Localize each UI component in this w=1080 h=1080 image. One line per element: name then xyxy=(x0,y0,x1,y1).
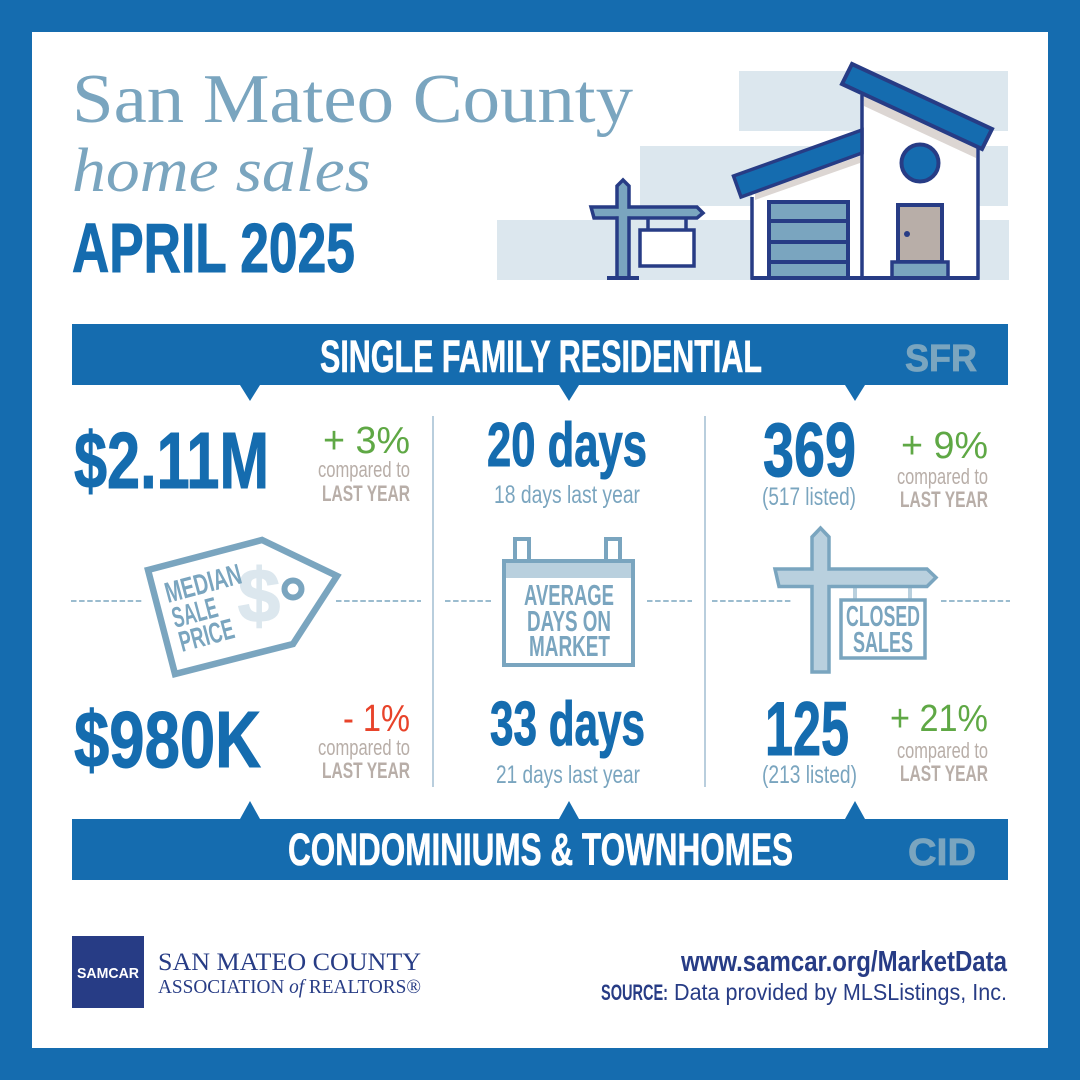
logo: SAMCAR: SAN MATEO COUNTY xyxy=(158,949,421,976)
stat: CID closed sales: + 21% xyxy=(890,698,988,740)
stat: SFR closed sales: LAST YEAR xyxy=(900,487,988,512)
stat: SFR closed sales: compared to xyxy=(897,464,988,489)
icon: calendar xyxy=(504,539,633,665)
stat: CID average days: 33 days xyxy=(490,690,645,759)
stat: SFR closed sales: (517 listed) xyxy=(762,483,856,511)
stat: CID average days xyxy=(490,690,645,789)
stat: SFR closed sales: + 9% xyxy=(901,425,988,467)
logo: SAMCAR xyxy=(72,936,421,1008)
stat: CID median sale price: - 1% xyxy=(343,698,410,740)
column dividers xyxy=(432,416,706,787)
banner: single family residential: SFR xyxy=(905,338,977,380)
title: home sales xyxy=(72,137,371,205)
stat: SFR median sale price: LAST YEAR xyxy=(322,481,410,506)
stat: CID closed sales: (213 listed) xyxy=(762,761,857,789)
stat: SFR closed sales xyxy=(762,408,988,512)
icon: price tag xyxy=(148,540,337,674)
icon: closed sales sign xyxy=(775,528,936,672)
title: San Mateo County xyxy=(72,61,633,138)
stat: SFR median sale price: compared to xyxy=(318,457,410,482)
footer source xyxy=(601,946,1008,1005)
stat: CID closed sales: LAST YEAR xyxy=(900,761,988,786)
logo: SAMCAR: ASSOCIATION of REALTORS® xyxy=(158,976,421,998)
title: APRIL 2025 xyxy=(72,209,355,287)
illustration: house and sign xyxy=(497,64,1009,280)
banner: condominiums and townhomes xyxy=(72,801,1008,880)
icon: calendar: AVERAGE xyxy=(524,580,614,612)
footer source: Data provided by MLSListings, Inc. xyxy=(674,979,1007,1005)
stat: SFR average days xyxy=(487,411,647,509)
stat: SFR average days: 18 days last year xyxy=(494,481,640,509)
logo: SAMCAR: SAMCAR xyxy=(77,965,139,982)
stat: SFR median sale price: $2.11M xyxy=(74,416,269,505)
title xyxy=(72,61,633,287)
dashed lines xyxy=(71,600,1010,602)
icon: price tag: SALE xyxy=(169,592,221,635)
icon: price tag: $ xyxy=(238,554,280,639)
stat: CID closed sales: 125 xyxy=(765,687,849,772)
icon: price tag: PRICE xyxy=(176,613,238,659)
banner: single family residential xyxy=(72,324,1008,401)
banner: single family residential: SINGLE FAMILY RESIDENTIAL xyxy=(320,331,762,382)
footer source: www.samcar.org/MarketData xyxy=(680,946,1008,978)
stat: CID average days: 21 days last year xyxy=(496,761,640,789)
icon: calendar: MARKET xyxy=(529,631,610,663)
stat: CID median sale price: $980K xyxy=(74,695,261,784)
stat: SFR median sale price: + 3% xyxy=(323,420,410,462)
icon: closed sales sign: SALES xyxy=(853,627,913,659)
stat: CID median sale price: compared to xyxy=(318,735,410,760)
icon: closed sales sign: CLOSED xyxy=(846,601,920,633)
icon: price tag: MEDIAN xyxy=(162,559,245,610)
stat: CID closed sales: compared to xyxy=(897,738,988,763)
banner: condominiums and townhomes: CONDOMINIUMS & TOWNHOMES xyxy=(288,824,793,875)
icon: calendar: DAYS ON xyxy=(527,606,611,638)
stat: SFR average days: 20 days xyxy=(487,411,647,480)
footer source: SOURCE: xyxy=(601,980,668,1005)
stat: CID median sale price: LAST YEAR xyxy=(322,758,410,783)
stat: SFR closed sales: 369 xyxy=(763,408,856,493)
stat: CID closed sales xyxy=(762,687,988,789)
banner: condominiums and townhomes: CID xyxy=(908,832,976,874)
